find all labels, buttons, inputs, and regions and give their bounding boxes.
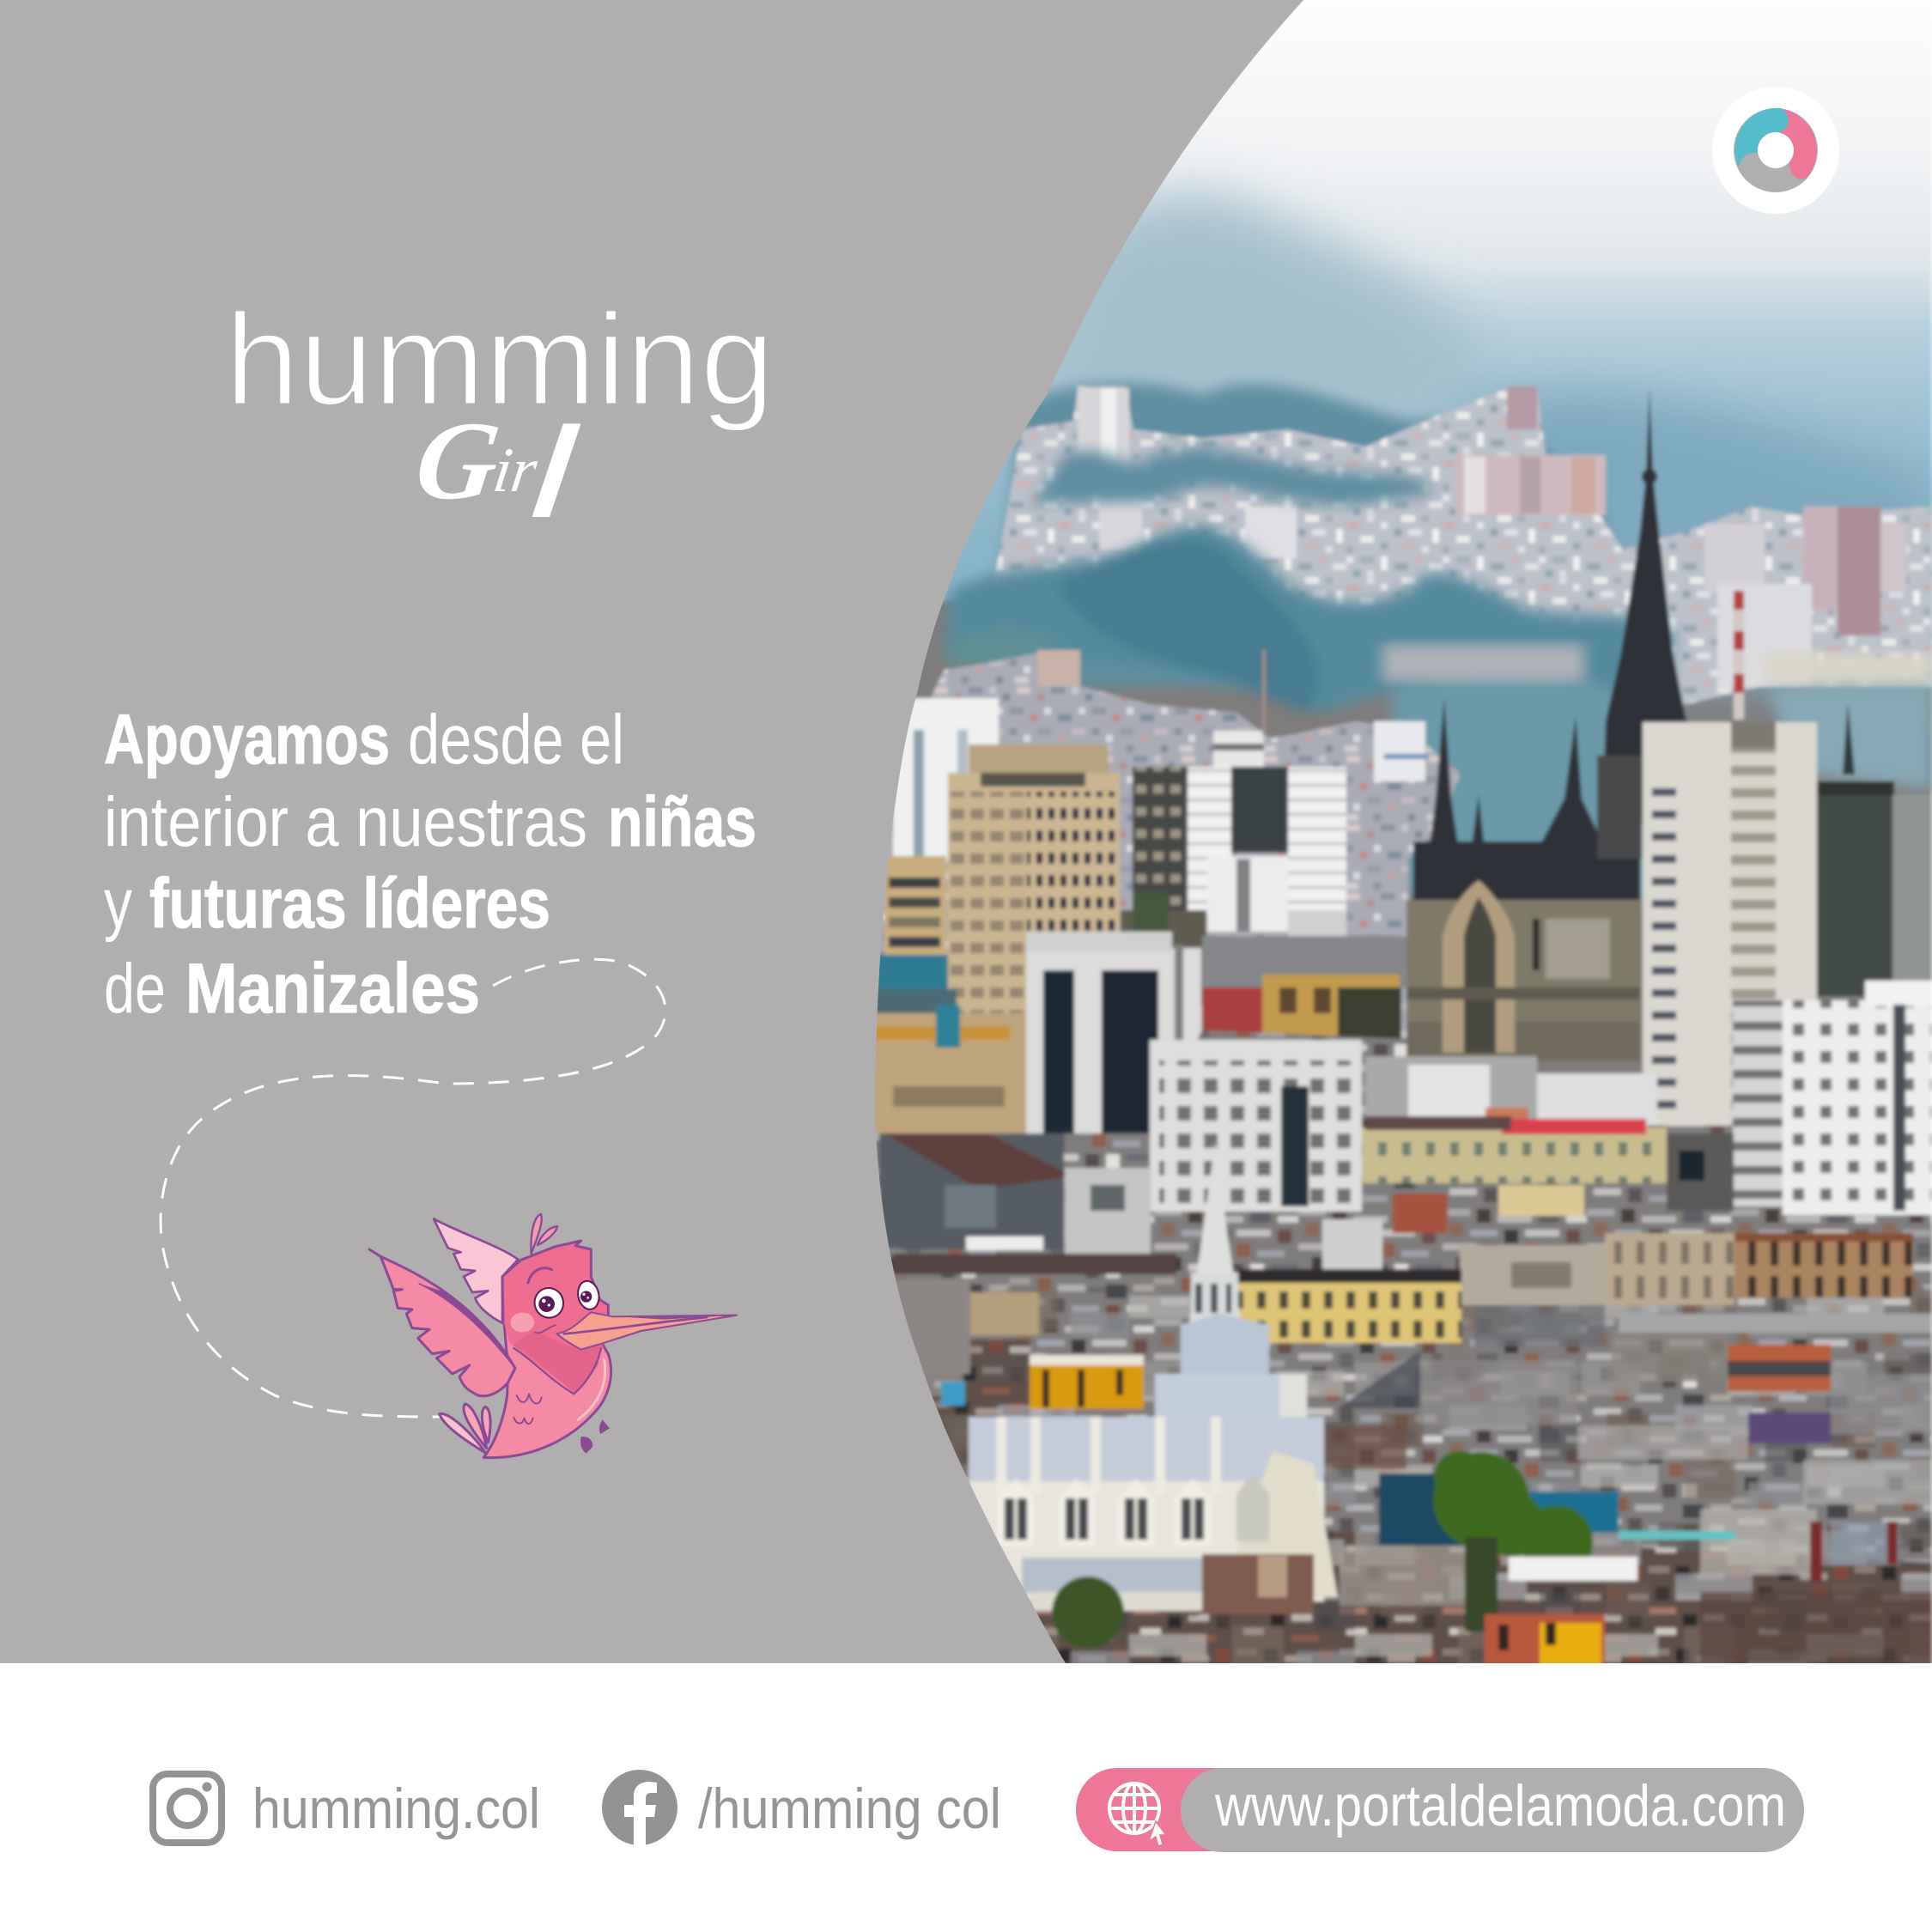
mid-ground city — [859, 653, 1460, 1048]
main message: niñas — [608, 783, 756, 861]
white building with windows — [1150, 1040, 1362, 1212]
main message — [104, 701, 756, 1028]
blue and teal buildings — [1379, 1473, 1735, 1546]
gray striped and white buildings — [1733, 981, 1932, 1215]
beak — [556, 1312, 737, 1350]
lower city rooftops — [859, 1030, 1932, 1683]
tail — [440, 1404, 490, 1453]
smile — [535, 1325, 556, 1333]
chest feathers — [513, 1394, 542, 1424]
white tower left — [893, 698, 999, 861]
drops — [580, 1419, 610, 1454]
Girl script — [409, 400, 585, 544]
dashed flight path — [161, 959, 665, 1417]
footer background — [0, 1663, 1932, 1932]
tan and brown blocks — [1605, 1233, 1913, 1305]
main message: desde el — [408, 701, 624, 779]
main message: futuras líderes — [149, 865, 550, 943]
main message: de — [104, 950, 166, 1028]
dark green building — [1817, 702, 1932, 1000]
photo: city of Manizales — [859, 0, 1932, 1683]
orange-tan building — [1202, 975, 1401, 1052]
gray curved panel — [0, 0, 1303, 1663]
distant mountain haze — [1460, 393, 1932, 687]
white church — [969, 1142, 1338, 1611]
footer: instagram — [153, 1774, 540, 1843]
footer: website pill: www.portaldelamoda.com — [1214, 1773, 1786, 1838]
footer: facebook — [602, 1770, 1001, 1845]
main message: Manizales — [185, 950, 480, 1028]
sky — [859, 0, 1932, 601]
hummingbird mascot — [369, 1214, 737, 1458]
orange house — [1485, 1614, 1605, 1683]
distant green hill — [987, 383, 1631, 687]
humming logo wordmark — [225, 287, 775, 544]
icon: facebook — [602, 1770, 677, 1845]
eyes — [532, 1279, 602, 1321]
small tan building — [884, 856, 946, 955]
icon: globe with cursor — [1109, 1783, 1166, 1846]
icon: instagram — [153, 1774, 222, 1843]
cathedral — [1413, 387, 1692, 910]
brow — [528, 1268, 552, 1283]
footer: facebook: /humming col — [698, 1777, 1001, 1840]
head — [502, 1241, 608, 1394]
main message: Apoyamos — [104, 701, 390, 779]
main message: y — [104, 865, 132, 943]
orange block — [1030, 1355, 1144, 1409]
dark and white tower — [1133, 650, 1346, 936]
footer: website pill — [1076, 1768, 1804, 1852]
Girl script: l — [526, 401, 585, 544]
footer: instagram: humming.col — [252, 1777, 540, 1840]
front wing — [369, 1249, 515, 1396]
yellow building — [1238, 1269, 1461, 1343]
red antenna — [1734, 591, 1744, 720]
back wing — [434, 1218, 518, 1323]
humming logo wordmark: humming — [225, 287, 775, 433]
Girl script: ir — [489, 435, 543, 506]
church windows — [998, 1473, 1269, 1546]
glass building — [1026, 932, 1201, 1154]
long yellow building — [1362, 1116, 1667, 1183]
body — [483, 1320, 611, 1458]
trees — [1052, 1451, 1593, 1649]
left low buildings — [879, 1133, 1151, 1254]
cheek — [510, 1313, 534, 1332]
brand circle logo — [1712, 87, 1839, 214]
green hills — [945, 526, 1674, 738]
roof blotches — [945, 1303, 1932, 1663]
main message: interior a nuestras — [104, 783, 587, 861]
distant city — [987, 386, 1932, 713]
Girl script: G — [409, 400, 507, 523]
throat — [513, 1331, 601, 1393]
crest — [531, 1214, 557, 1254]
tall beige building — [1643, 722, 1817, 1126]
upper green band — [1030, 447, 1434, 507]
tan building — [948, 744, 1120, 1030]
